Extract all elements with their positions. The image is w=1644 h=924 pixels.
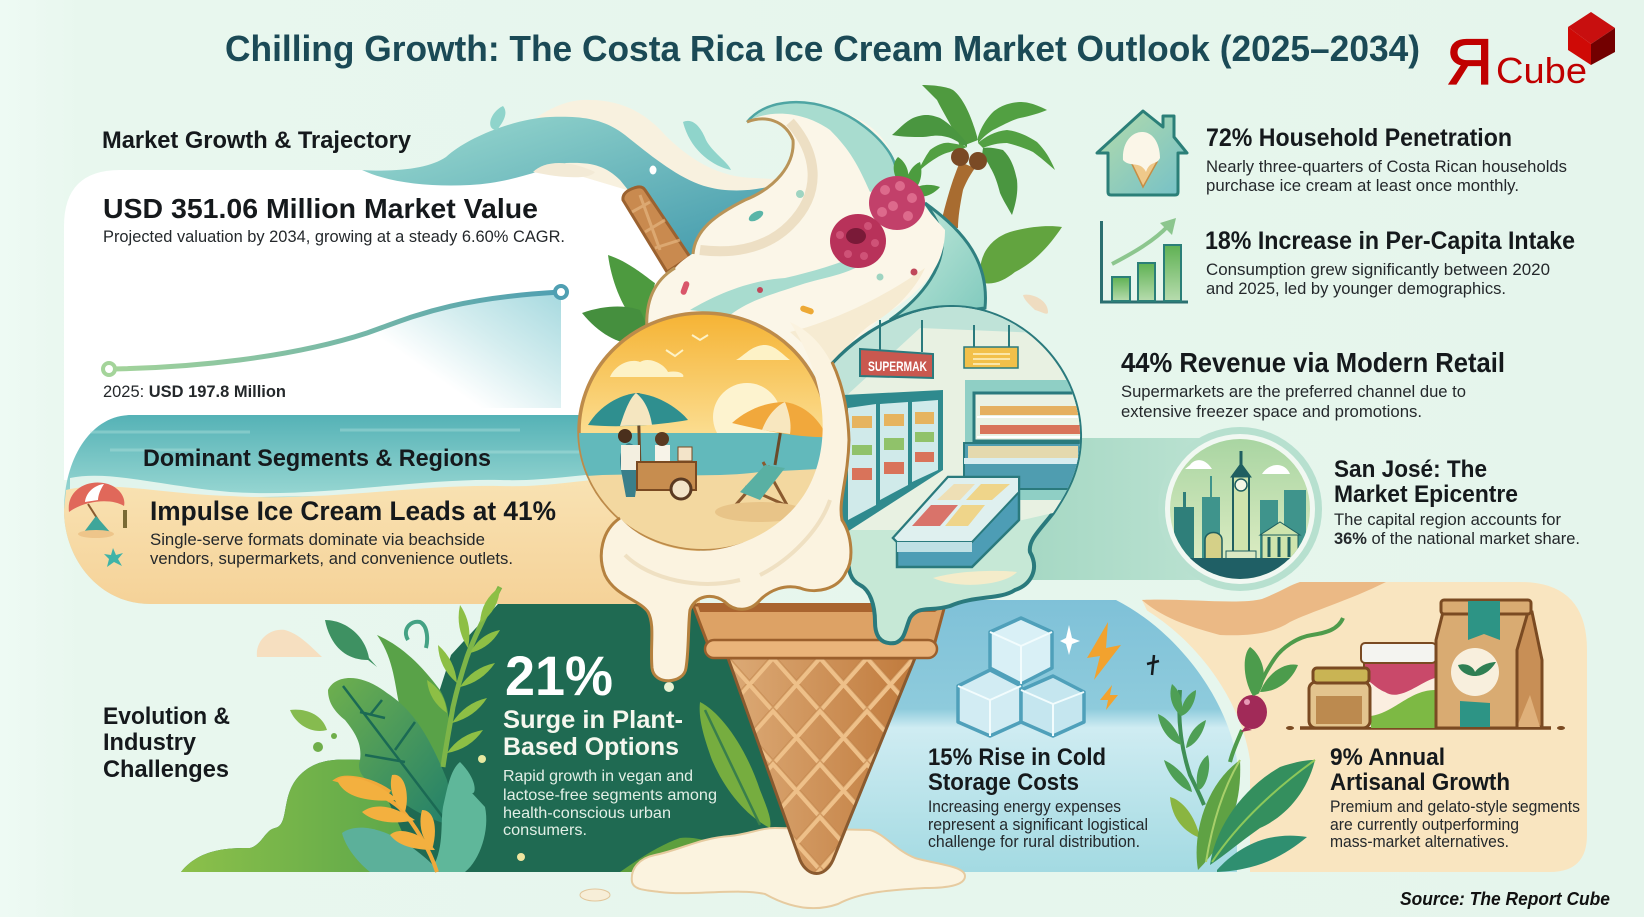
per-capita text: and 2025, led by younger demographics. <box>1206 280 1506 298</box>
melting cream <box>601 322 851 681</box>
impulse text <box>150 531 513 568</box>
umbrella left <box>588 393 688 461</box>
logo: RCube: Cube <box>1496 50 1587 91</box>
panel: San José band <box>1030 438 1250 580</box>
clouds <box>610 345 790 377</box>
cold storage heading: Storage Costs <box>928 769 1079 796</box>
plant-based heading <box>503 706 683 761</box>
icon: beach umbrella <box>69 482 125 538</box>
San José text: 36% of the national market share. <box>1334 530 1580 548</box>
panel: cold storage <box>820 600 1250 872</box>
artisanal heading <box>1330 744 1510 796</box>
plant-based text <box>503 768 717 839</box>
plant-based text: Rapid growth in vegan and <box>503 768 693 785</box>
retail heading: 44% Revenue via Modern Retail <box>1121 347 1505 378</box>
section heading: market growth: Market Growth & Trajectory <box>102 127 412 154</box>
panel: market value <box>64 170 680 480</box>
cold storage text: represent a significant logistical <box>928 816 1148 834</box>
chart start label: 2025: USD 197.8 Million <box>103 383 286 401</box>
section heading: evolution: Industry <box>103 729 197 756</box>
market value text: Projected valuation by 2034, growing at a steady 6.60% CAGR. <box>103 228 565 246</box>
retail text: extensive freezer space and promotions. <box>1121 403 1422 421</box>
household heading: 72% Household Penetration <box>1206 124 1512 152</box>
plant-based heading: Based Options <box>503 733 679 761</box>
stat: San José <box>1158 427 1580 591</box>
illustration: palm tree <box>892 85 1055 228</box>
plant-based text: consumers. <box>503 822 587 839</box>
plant-based heading: Surge in Plant- <box>503 706 683 734</box>
plant sprig <box>1158 684 1209 838</box>
vendor cart and people <box>618 429 696 499</box>
icon: rising bar chart <box>1102 218 1188 302</box>
cold storage heading <box>928 744 1106 796</box>
illustration: soft serve swirl <box>647 102 945 380</box>
per-capita text: Consumption grew significantly between 2020 <box>1206 261 1550 279</box>
icon: city skyline <box>1158 427 1322 591</box>
retail text: Supermarkets are the preferred channel due to <box>1121 383 1466 401</box>
plant-based text: health-conscious urban <box>503 805 671 822</box>
artisanal text: mass-market alternatives. <box>1330 833 1509 851</box>
illustration: waffle cone <box>693 603 945 874</box>
sign: supermarket: SUPERMAK <box>868 358 927 374</box>
icon: ice cubes <box>958 618 1084 736</box>
source line: Source: The Report Cube <box>1400 889 1610 909</box>
section heading: evolution <box>103 703 230 783</box>
artisanal heading: Artisanal Growth <box>1330 769 1510 796</box>
sign: supermarket <box>860 320 1018 378</box>
freezer wall <box>835 390 943 532</box>
sparkle marks <box>1060 625 1080 655</box>
illustration: beach scoop <box>570 313 851 681</box>
title: Chilling Growth: The Costa Rica Ice Cream Market Outlook (2025–2034) <box>225 28 1420 69</box>
cold storage heading: 15% Rise in Cold <box>928 744 1106 771</box>
impulse text: Single-serve formats dominate via beachside <box>150 531 485 549</box>
artisanal text: Premium and gelato-style segments <box>1330 798 1580 816</box>
household text: Nearly three-quarters of Costa Rican households <box>1206 158 1567 176</box>
plant with radish <box>1197 618 1343 872</box>
stat: per-capita intake <box>1102 218 1575 302</box>
San José heading: San José: The <box>1334 456 1487 483</box>
illustration: cream drop <box>1023 295 1048 314</box>
stat: 21 percent: 21% <box>505 644 613 707</box>
section heading: dominant segments: Dominant Segments & Regions <box>143 445 491 472</box>
logo: RCube <box>1446 12 1615 98</box>
illustration: mint back scoop <box>890 203 985 320</box>
section heading: evolution: Challenges <box>103 756 229 783</box>
freezer case <box>964 443 1084 489</box>
illustration: right leaf <box>980 226 1062 283</box>
plant-based text: lactose-free segments among <box>503 787 717 804</box>
logo: RCube: Я <box>1446 25 1493 98</box>
stat: household penetration <box>1097 111 1567 195</box>
San José text <box>1334 511 1580 548</box>
cold storage text: challenge for rural distribution. <box>928 833 1140 851</box>
San José heading <box>1334 456 1518 508</box>
illustration: leaves behind scoop <box>582 255 655 345</box>
illustration: wafer stick <box>623 187 690 272</box>
section heading: evolution: Evolution & <box>103 703 230 730</box>
icon: artisanal products <box>1286 600 1565 730</box>
household text: purchase ice cream at least once monthly. <box>1206 177 1519 195</box>
artisanal text <box>1330 798 1580 851</box>
cold storage text <box>928 798 1148 851</box>
artisanal text: are currently outperforming <box>1330 816 1519 834</box>
beach chair <box>733 462 787 508</box>
illustration: raspberries <box>830 157 940 268</box>
stat: modern retail <box>1121 347 1505 421</box>
umbrella right <box>732 402 827 465</box>
per-capita text <box>1206 261 1550 298</box>
plant decoration <box>257 587 771 872</box>
panel: artisanal <box>1142 582 1587 872</box>
household text <box>1206 158 1567 195</box>
illustration: puddle of melted cream <box>580 828 965 908</box>
icon: lightning <box>1087 622 1121 710</box>
impulse text: vendors, supermarkets, and convenience outlets. <box>150 550 513 568</box>
icon: starfish <box>104 548 123 567</box>
shelving unit <box>974 393 1084 441</box>
artisanal heading: 9% Annual <box>1330 744 1445 771</box>
retail text <box>1121 383 1466 421</box>
per-capita heading: 18% Increase in Per-Capita Intake <box>1205 227 1575 255</box>
illustration: splash wave <box>362 100 792 256</box>
illustration: supermarket scoop <box>820 300 1090 643</box>
impulse heading: Impulse Ice Cream Leads at 41% <box>150 496 556 526</box>
panel: dominant segments beach <box>64 415 700 604</box>
freezer chest <box>893 477 1019 567</box>
market value heading: USD 351.06 Million Market Value <box>103 193 538 224</box>
icon: house with ice cream <box>1097 111 1187 195</box>
San José text: The capital region accounts for <box>1334 511 1561 529</box>
San José heading: Market Epicentre <box>1334 481 1518 508</box>
cold storage text: Increasing energy expenses <box>928 798 1121 816</box>
line chart: market trajectory <box>103 286 567 408</box>
panel: plant-based <box>181 587 810 872</box>
